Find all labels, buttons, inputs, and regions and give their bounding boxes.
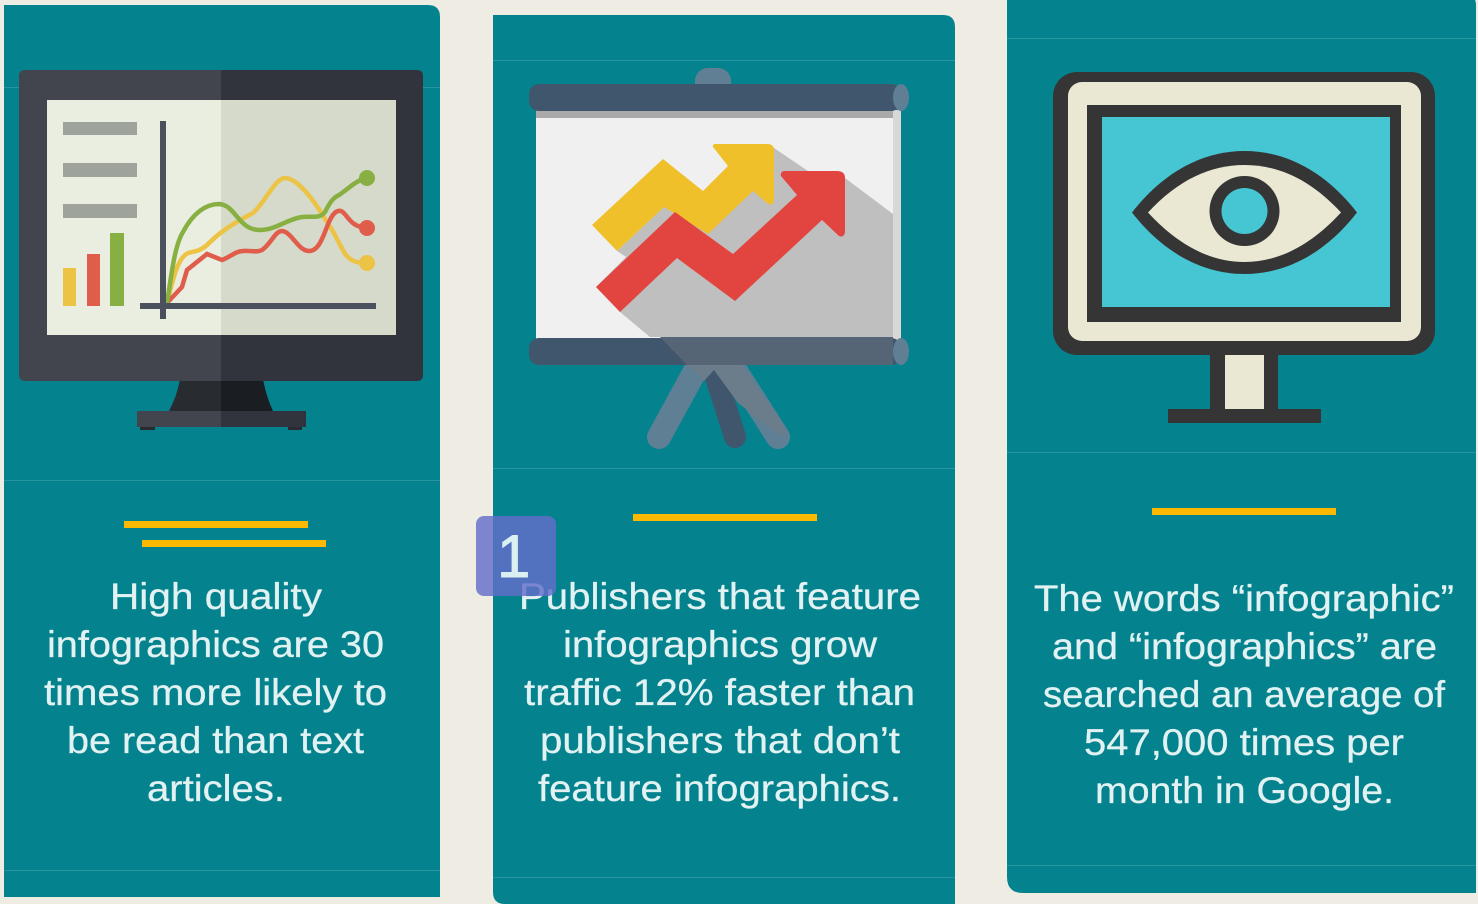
text block: search volume statistic: 547,000 times per [1084,722,1404,763]
panel: google searches [1007,0,1476,893]
accent rules [124,521,326,547]
icon: projector screen with rising arrows [529,68,909,437]
icon: desktop monitor with charts [19,70,423,430]
accent rule [633,514,817,521]
accent rule [1152,508,1336,515]
icon: monitor with eye [1053,72,1435,423]
text block: search volume statistic: The words “infographic” [1034,578,1454,619]
text block: read rate statistic: High quality [110,576,323,617]
number badge: 1 [497,523,530,590]
text block: search volume statistic: searched an average of [1043,674,1446,715]
panel: high quality infographics [4,5,440,897]
text block: traffic statistic: publishers that don’t [540,720,901,761]
text block: read rate statistic: times more likely to [44,672,387,713]
text block: traffic statistic: feature infographics. [538,768,901,809]
panel: publishers growth [493,15,955,904]
text block: read rate statistic [44,576,387,809]
text block: read rate statistic: be read than text [67,720,365,761]
text block: read rate statistic: infographics are 30 [47,624,384,665]
text block: read rate statistic: articles. [147,768,285,809]
text block: search volume statistic [1034,578,1454,811]
text block: traffic statistic: Publishers that feature [519,576,921,617]
text block: search volume statistic: month in Google. [1095,770,1394,811]
text block: search volume statistic: and “infographics” are [1052,626,1437,667]
number badge [476,516,556,596]
text block: traffic statistic [519,576,921,809]
text block: traffic statistic: infographics grow [563,624,877,665]
text block: traffic statistic: traffic 12% faster than [524,672,915,713]
